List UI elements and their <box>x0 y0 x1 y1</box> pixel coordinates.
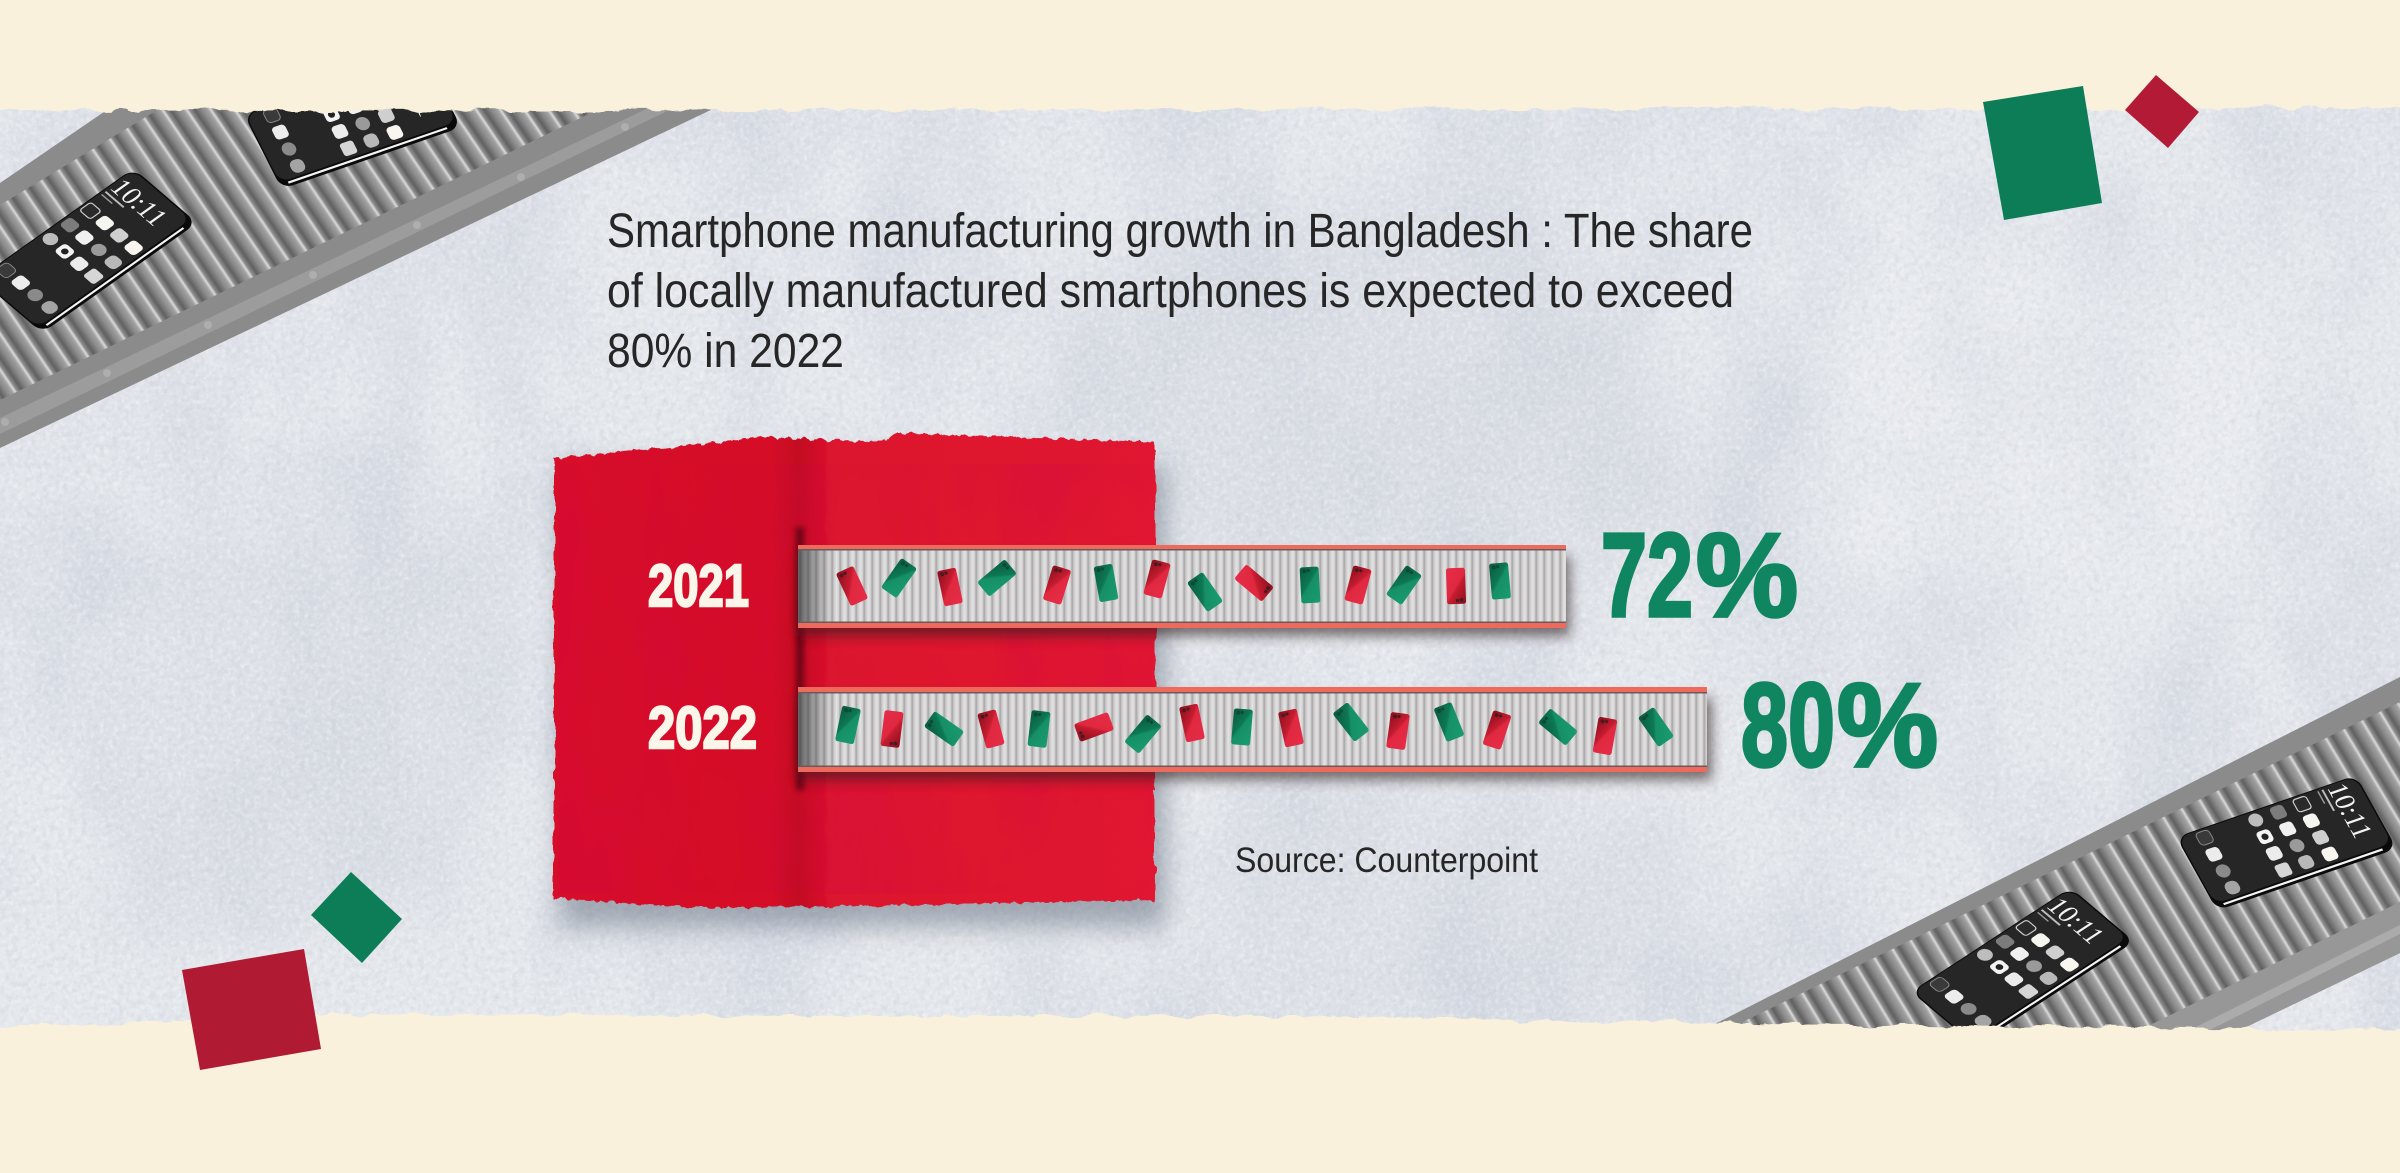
source: Source: Counterpoint <box>1235 841 1538 880</box>
small phones 2022 <box>835 702 1674 755</box>
icon: phone on belt 3: 10:11 <box>2039 893 2111 949</box>
icon: phone on belt 2: 10:11 <box>387 57 444 120</box>
icon: phone on belt 3 <box>1911 888 2134 1046</box>
conveyor bar: 2021 <box>798 545 1566 628</box>
texture overlay <box>558 464 1152 894</box>
label: 2022: 2022 <box>648 695 757 761</box>
rail rivets <box>1 123 629 426</box>
label: 2021: 2021 <box>648 553 749 619</box>
red sheet <box>554 433 1155 908</box>
small phones 2021 <box>836 558 1511 612</box>
icon: phone on belt 4 <box>2176 775 2397 911</box>
title: Smartphone manufacturing growth in Bangladesh : The share <box>607 205 1753 258</box>
conveyor bar: 2022 <box>798 687 1707 772</box>
value: 80%: % <box>1837 659 1938 792</box>
rollers <box>1726 702 2400 1030</box>
icon: phone on belt 2 <box>244 53 461 189</box>
confetti: red sheet bottom left <box>182 949 321 1070</box>
conveyor belt: top left <box>0 53 715 448</box>
value: 80% <box>1741 659 1938 792</box>
value: 80%: 80 <box>1741 659 1835 792</box>
shadow cast by belts <box>796 527 1712 790</box>
panel: red torn paper <box>554 433 1166 927</box>
icon: phone on belt 1: 10:11 <box>103 174 174 231</box>
confetti: green diamond bottom left <box>311 872 402 963</box>
value: 72%: % <box>1696 509 1798 642</box>
icon: phone on belt 1 <box>0 168 197 333</box>
value: 72%: 72 <box>1601 509 1693 642</box>
confetti: red diamond top right <box>2125 75 2199 148</box>
conveyor belt: bottom right <box>1703 677 2400 1046</box>
rollers <box>0 100 601 400</box>
value: 72% <box>1601 509 1798 642</box>
icon: phone on belt 4: 10:11 <box>2320 780 2379 842</box>
title: of locally manufactured smartphones is expected to exceed <box>607 265 1734 318</box>
panel shadow <box>560 465 1166 927</box>
title: 80% in 2022 <box>607 325 844 378</box>
lower side rail <box>2140 902 2400 1030</box>
side rail highlight <box>0 100 690 434</box>
confetti: green sheet top right <box>1983 86 2102 220</box>
title <box>607 205 1753 378</box>
